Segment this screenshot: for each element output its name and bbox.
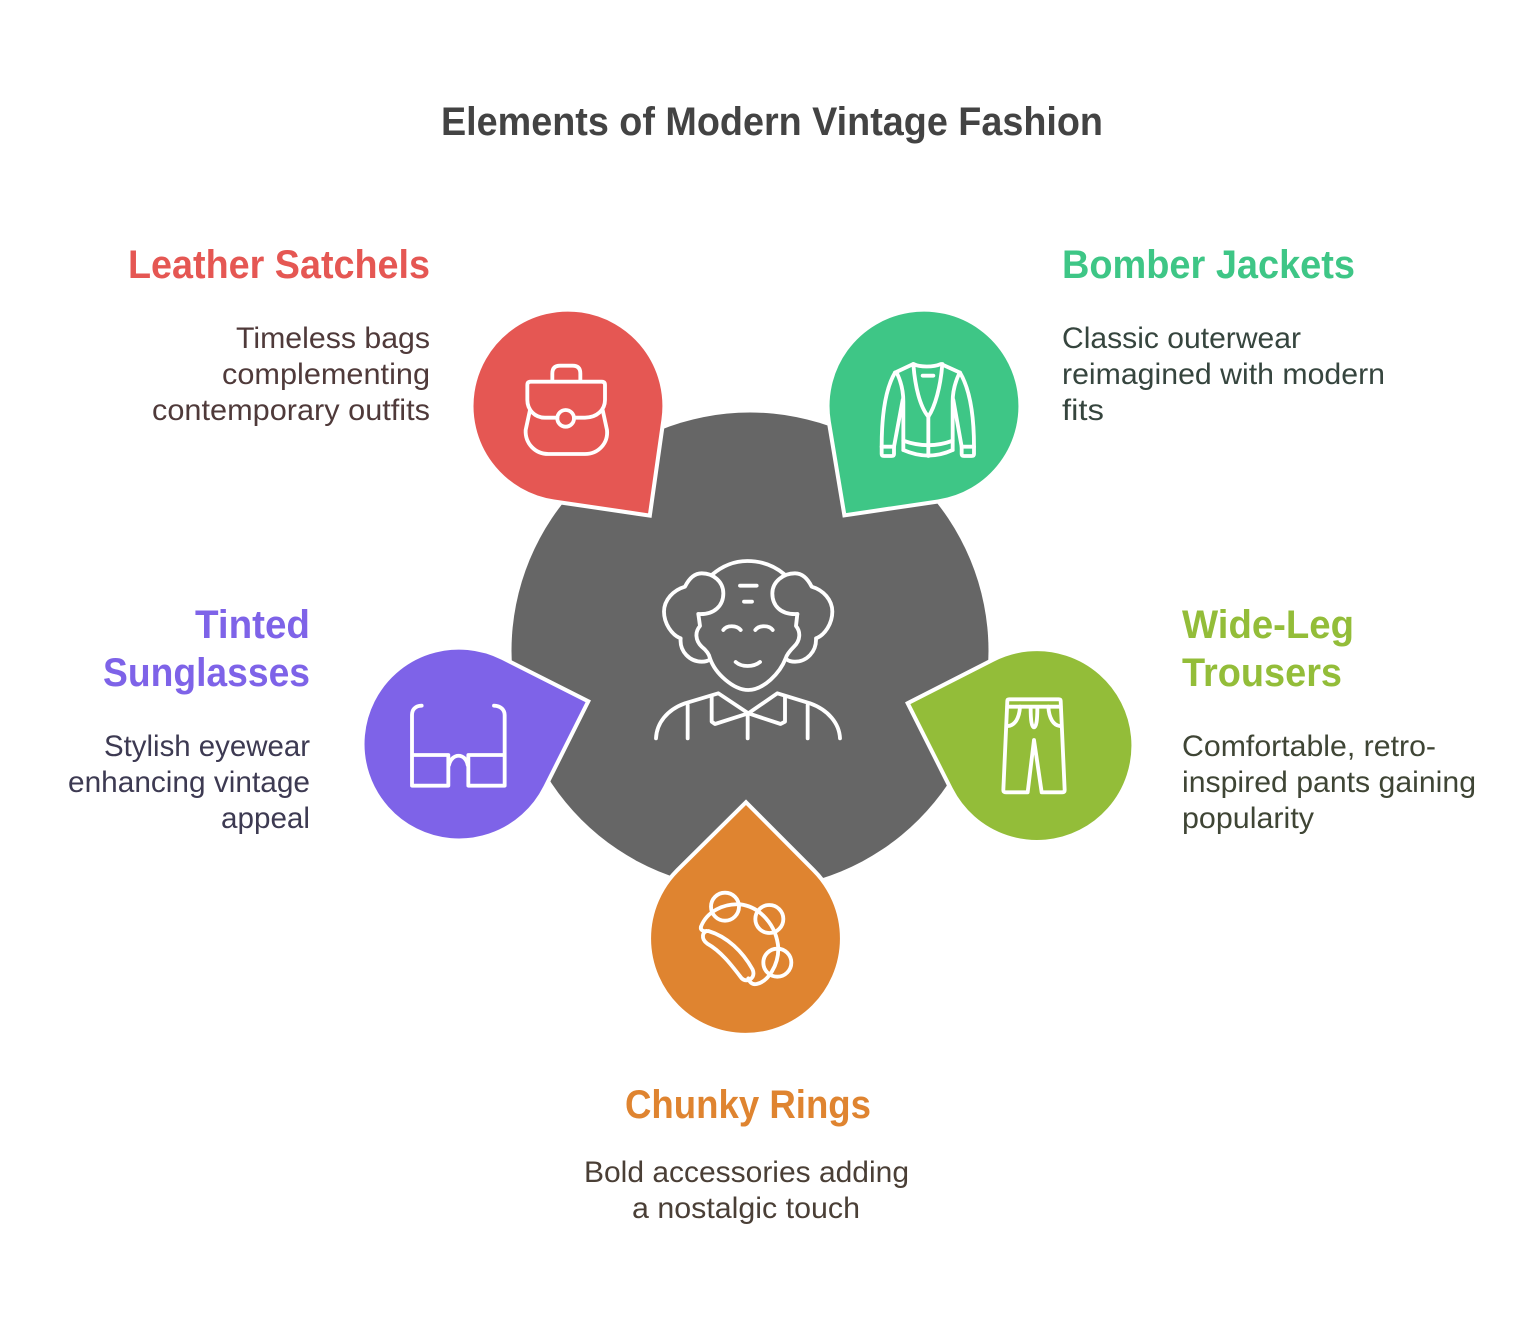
- icon: jacket: [882, 364, 974, 456]
- panel: tinted sunglasses: [68, 603, 588, 840]
- description: Classic outerwear: [1062, 322, 1301, 355]
- title: Elements of Modern Vintage Fashion: [441, 100, 1103, 144]
- description: a nostalgic touch: [632, 1192, 860, 1225]
- description: complementing: [222, 358, 430, 391]
- droplet: lime: [908, 649, 1133, 842]
- description: [1182, 730, 1476, 835]
- panel: chunky rings: [584, 802, 909, 1225]
- droplet: red: [472, 310, 664, 516]
- description: [584, 1156, 909, 1225]
- icon: vintage person: [656, 561, 840, 738]
- heading: Sunglasses: [103, 651, 310, 695]
- icon: trousers: [1003, 699, 1065, 792]
- description: popularity: [1182, 802, 1314, 835]
- droplet: orange: [649, 802, 842, 1035]
- description: enhancing vintage: [68, 766, 310, 799]
- description: [1062, 322, 1385, 427]
- heading: Leather Satchels: [128, 243, 430, 287]
- heading: Chunky Rings: [625, 1083, 871, 1127]
- heading: Trousers: [1182, 651, 1342, 695]
- droplet: purple: [363, 648, 588, 840]
- description: appeal: [221, 802, 310, 835]
- description: contemporary outfits: [152, 394, 430, 427]
- description: Comfortable, retro-: [1182, 730, 1436, 763]
- droplet: green: [828, 310, 1020, 515]
- icon: rings: [701, 893, 791, 984]
- icon: satchel: [526, 366, 607, 454]
- description: Timeless bags: [236, 322, 430, 355]
- icon: glasses: [412, 706, 505, 786]
- description: inspired pants gaining: [1182, 766, 1476, 799]
- panel: leather satchels: [128, 243, 664, 516]
- heading: Bomber Jackets: [1062, 243, 1355, 287]
- description: [68, 730, 310, 835]
- heading: [103, 603, 310, 695]
- description: Bold accessories adding: [584, 1156, 909, 1189]
- description: Stylish eyewear: [104, 730, 310, 763]
- heading: Wide-Leg: [1182, 603, 1354, 647]
- description: reimagined with modern: [1062, 358, 1385, 391]
- panel: wide-leg trousers: [908, 603, 1476, 842]
- description: fits: [1062, 394, 1104, 427]
- description: [152, 322, 430, 427]
- panel: bomber jackets: [828, 243, 1385, 515]
- central grey circle: [512, 412, 988, 890]
- heading: [1182, 603, 1354, 695]
- heading: Tinted: [195, 603, 310, 647]
